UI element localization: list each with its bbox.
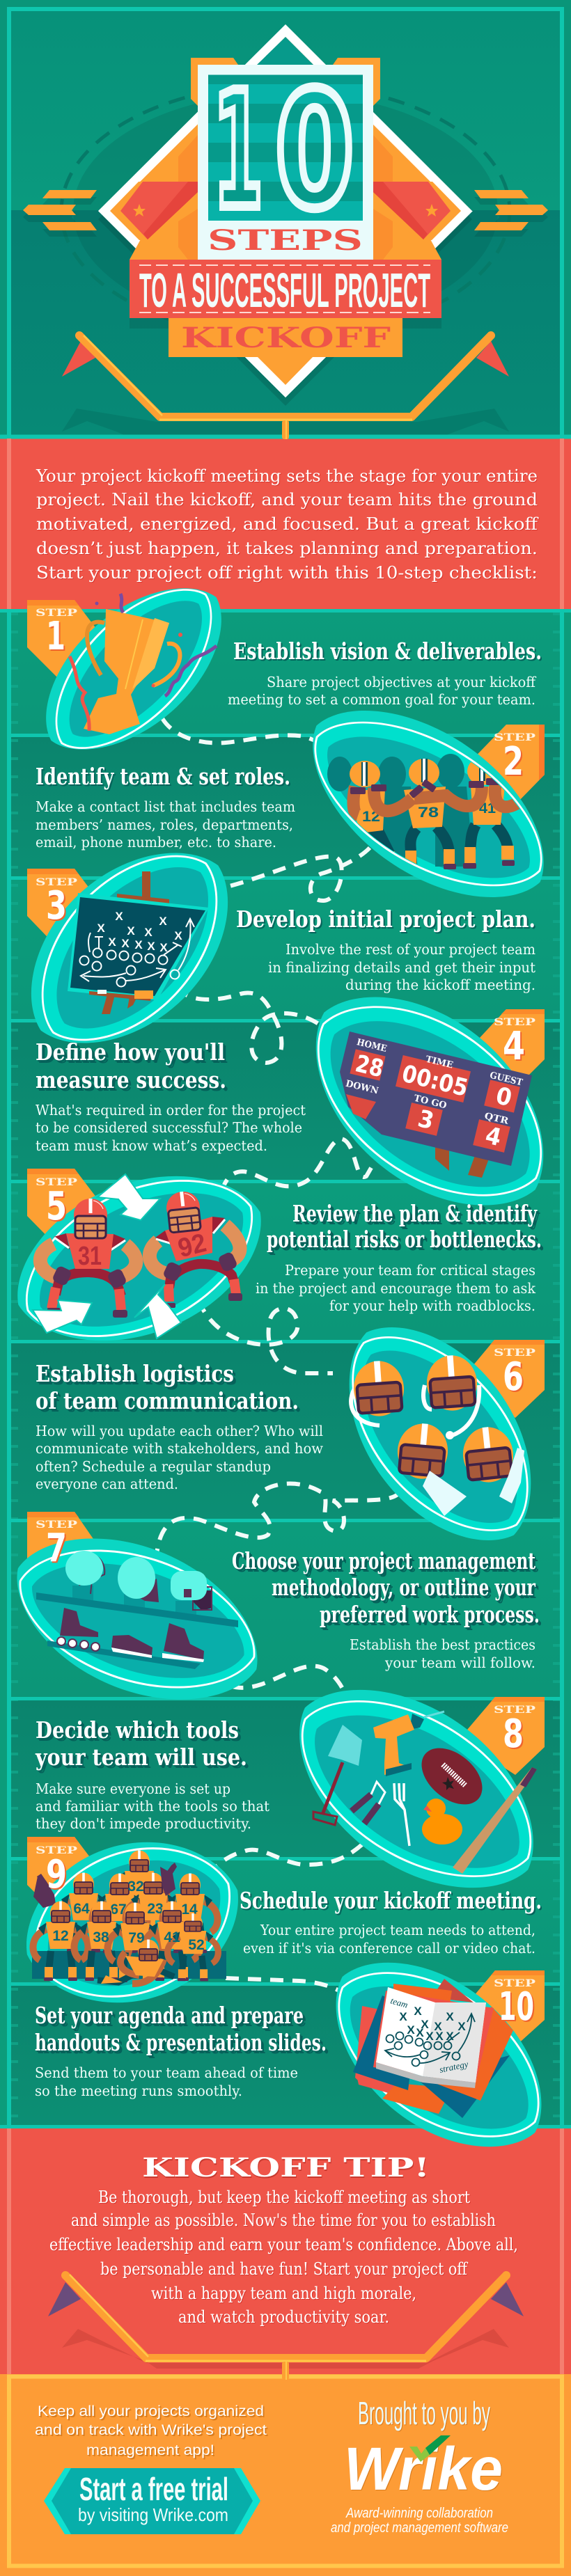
player 12: 12 [362, 809, 380, 825]
player 92: 92 [175, 1228, 209, 1263]
kickoff tip body: be personable and have fun! Start your project off [100, 2259, 469, 2279]
step 3 ball [0, 798, 277, 1098]
icon: open playbook [376, 1987, 486, 2088]
step 6 label: STEP [494, 1348, 536, 1359]
step 5 body: in the project and encourage them to ask [256, 1280, 536, 1297]
STEPS word: STEPS [208, 224, 363, 257]
helmets [352, 1354, 516, 1485]
bench [32, 1951, 226, 1979]
red tip band [0, 2128, 571, 2374]
step 6 heading: of team communication. [36, 1387, 299, 1414]
call to action button: by visiting Wrike.com [78, 2504, 228, 2525]
back row numbers [73, 1879, 198, 1918]
step 8 heading: your team will use. [35, 1744, 247, 1771]
front row numbers: 52 [188, 1937, 205, 1953]
scoreboard: HOME [356, 1037, 388, 1054]
back row numbers: 23 [147, 1901, 164, 1917]
kickoff tip body [49, 2188, 518, 2327]
step 4 body: to be considered successful? The whole [36, 1119, 302, 1136]
player 31 [40, 1199, 136, 1318]
back row numbers: 67 [110, 1902, 127, 1918]
step 8 number: 8 [503, 1712, 524, 1757]
step 7 heading [232, 1547, 540, 1628]
footer promo text: management app! [86, 2442, 214, 2458]
step 8 heading [35, 1716, 247, 1771]
white diamond [98, 24, 472, 397]
inner diamond [111, 37, 460, 385]
back row players [56, 1850, 217, 1953]
step 6 body [36, 1423, 323, 1492]
step 2 heading: Identify team & set roles. [36, 763, 290, 790]
white number card [198, 65, 373, 260]
footer promo text [35, 2403, 267, 2458]
back row numbers: 14 [181, 1902, 198, 1918]
step 6 heading [36, 1360, 299, 1414]
KICKOFF word: KICKOFF [181, 322, 391, 354]
step 8 heading: Decide which tools [36, 1716, 239, 1744]
step 9 body: even if it's via conference call or video chat. [243, 1940, 535, 1957]
player 78: 78 [418, 805, 439, 821]
icon: team huddle [327, 754, 521, 871]
step 9 body [243, 1922, 535, 1957]
step 2 label: STEP [494, 732, 536, 743]
white lower corners [98, 211, 473, 251]
step 3 body: during the kickoff meeting. [345, 977, 535, 993]
step 1 body: meeting to set a common goal for your team. [228, 691, 535, 708]
wing chevrons left [23, 190, 97, 237]
step 7 panel [0, 1499, 540, 1739]
step 6 ball [295, 1282, 571, 1586]
front row players [33, 1902, 218, 1982]
intro paragraph: Your project kickoff meeting sets the stage for your entire [36, 466, 538, 486]
icon: chalkboard play: X [108, 935, 116, 949]
step 6 number: 6 [503, 1354, 524, 1400]
icon: open playbook: X [416, 2026, 424, 2039]
player 78 [404, 759, 456, 871]
icon: open playbook: strategy [439, 2059, 469, 2075]
step 8 body: Make sure everyone is set up [36, 1780, 230, 1797]
step 7 number: 7 [46, 1526, 67, 1571]
kickoff tip body: Be thorough, but keep the kickoff meeting as short [98, 2188, 470, 2207]
step 1 ball [7, 541, 260, 797]
icon: skates and cleat [57, 1608, 204, 1662]
icon: stack of books [353, 1979, 513, 2118]
team players group [33, 1850, 218, 1984]
diamond shadow [98, 33, 472, 406]
icon: open playbook: X [434, 2020, 442, 2033]
step 1 badge [27, 600, 107, 682]
step 6 badge [460, 1340, 545, 1418]
icon: shovel [313, 1725, 362, 1825]
step 3 panel [0, 798, 536, 1098]
step 3 body: Involve the rest of your project team [286, 941, 535, 958]
scoreboard: 3 [415, 1105, 437, 1135]
intro paragraph: motivated, energized, and focused. But a great kickoff [36, 514, 539, 534]
wrike tagline: Award-winning collaboration [345, 2506, 493, 2521]
icon: chalkboard play: X [134, 938, 143, 951]
kickoff tip body: and watch productivity soar. [178, 2307, 389, 2327]
back row numbers: 32 [127, 1879, 144, 1895]
icon: chalkboard play: X [144, 926, 152, 939]
kickoff orange box [169, 317, 402, 357]
step 3 body [268, 941, 536, 993]
step 7 body [350, 1636, 535, 1671]
icon: drill [373, 1712, 444, 1776]
step 5 ball [0, 1125, 297, 1391]
header dashed field ellipse [61, 84, 510, 338]
icon: open playbook: X [414, 2005, 422, 2018]
icon: open playbook: X [446, 2030, 454, 2043]
icon: open playbook: X [435, 2030, 444, 2043]
step 7 ball [0, 1499, 291, 1739]
step 6 heading: Establish logistics [36, 1360, 234, 1387]
footer promo text: and on track with Wrike's project [35, 2421, 267, 2438]
number 10 [213, 58, 354, 244]
wrike tagline [331, 2506, 508, 2536]
step 1 label: STEP [36, 608, 78, 619]
step 10 heading: handouts & presentation slides. [35, 2029, 327, 2056]
header badge [23, 24, 548, 406]
step 5 heading [267, 1200, 542, 1253]
step 1 body [228, 674, 536, 708]
step 10 panel [35, 1916, 571, 2193]
step 7 body: your team will follow. [384, 1654, 535, 1671]
wrike tagline: and project management software [331, 2520, 508, 2536]
scoreboard: DOWN [345, 1079, 380, 1097]
step 3 badge [27, 869, 107, 952]
kickoff tip heading: KICKOFF TIP! [142, 2152, 430, 2183]
icon: chalkboard play: X [174, 929, 182, 942]
step 9 panel [0, 1798, 542, 2047]
player 41 [463, 757, 515, 869]
step 3 label: STEP [36, 877, 78, 888]
step 8 label: STEP [494, 1705, 536, 1716]
kickoff orange box shadow [130, 317, 441, 329]
step 4 number: 4 [503, 1024, 525, 1069]
step 2 panel [36, 663, 571, 945]
icon: chalkboard play: X [121, 937, 130, 950]
icon: football [411, 1737, 493, 1816]
player 92 [150, 1190, 242, 1308]
step 9 number: 9 [46, 1852, 67, 1897]
scoreboard: 4 [483, 1121, 504, 1152]
headset [351, 1385, 479, 1437]
step 10 badge [467, 1970, 545, 2046]
step 3 body: in finalizing details and get their input [268, 959, 536, 976]
step 10 number: 10 [499, 1984, 534, 2030]
step 4 heading: measure success. [36, 1066, 226, 1093]
step 1 panel [7, 541, 542, 797]
front row numbers: 41 [164, 1929, 180, 1945]
scoreboard: GUEST [489, 1070, 524, 1089]
step 2 ball [267, 663, 571, 945]
step 5 badge [27, 1169, 107, 1251]
icon: megaphone and glove [423, 1448, 524, 1516]
orange tabs [191, 58, 380, 106]
icon: baseball bat [453, 1767, 537, 1874]
goal post bottom [48, 2275, 524, 2380]
scoreboard: 28 [352, 1050, 386, 1083]
step 5 panel [0, 1125, 542, 1391]
step 8 body [36, 1780, 270, 1832]
step 6 body: communicate with stakeholders, and how [36, 1440, 323, 1457]
step 6 body: everyone can attend. [36, 1476, 178, 1492]
wrike logo: Wrike [344, 2435, 503, 2503]
icon: open playbook: X [425, 2030, 434, 2043]
icon: open playbook: X [446, 2010, 454, 2023]
confetti ribbons [70, 594, 217, 731]
goal post shadow on header [62, 409, 509, 448]
icon: rubber duck [422, 1799, 462, 1844]
icon: trophy [84, 609, 180, 734]
step 9 label: STEP [36, 1845, 78, 1856]
step 2 body: email, phone number, etc. to share. [36, 834, 276, 851]
scoreboard: TO GO [413, 1093, 448, 1111]
icon: helmets rack [65, 1551, 212, 1611]
red side bands with stars [110, 182, 461, 240]
step 5 number: 5 [46, 1184, 67, 1229]
goal post shadow in tip band [62, 2329, 509, 2369]
step 5 body [256, 1262, 536, 1314]
intro paragraph: project. Nail the kickoff, and your team hits the ground [36, 490, 538, 509]
icon: open playbook: X [421, 2018, 429, 2031]
call to action button: Start a free trial [79, 2471, 228, 2507]
pointing gloves [33, 1863, 177, 1908]
step 7 body: Establish the best practices [350, 1636, 535, 1653]
step 9 ball [0, 1798, 273, 2047]
step 8 body: they don't impede productivity. [36, 1815, 251, 1832]
wing chevrons right [474, 190, 548, 237]
kneeling player [97, 1939, 174, 1984]
step 4 badge [461, 1009, 545, 1089]
teal diamond apex [257, 37, 313, 65]
header background [0, 0, 571, 438]
step 7 badge [27, 1512, 117, 1594]
step 4 ball [261, 944, 571, 1258]
number 10: 1 [213, 58, 263, 244]
step 4 body: What's required in order for the project [36, 1102, 306, 1119]
step 3 number: 3 [46, 883, 67, 929]
step 10 heading: Set your agenda and prepare [35, 2002, 304, 2029]
step 1 number: 1 [46, 614, 65, 659]
intro paragraph: doesn’t just happen, it takes planning and preparation. [36, 539, 538, 558]
icon: chalkboard play: X [147, 940, 155, 953]
step 7 label: STEP [36, 1519, 78, 1531]
step 2 body: Make a contact list that includes team [36, 798, 295, 815]
step 4 panel [36, 944, 571, 1258]
dashed route between steps [157, 718, 400, 1993]
step 2 body [36, 798, 295, 851]
step 5 label: STEP [36, 1177, 78, 1188]
player 41: 41 [479, 800, 496, 816]
icon: chalkboard play: X [159, 941, 168, 954]
equipment shelves [36, 1586, 238, 1669]
step 2 number: 2 [503, 739, 524, 784]
scoreboard: QTR [483, 1111, 510, 1127]
player 31: 31 [78, 1242, 102, 1271]
step 9 badge [27, 1837, 107, 1920]
step 2 badge [464, 725, 545, 805]
step 5 body: Prepare your team for critical stages [285, 1262, 535, 1279]
step 2 body: members’ names, roles, departments, [36, 816, 293, 833]
step 5 body: for your help with roadblocks. [329, 1297, 535, 1314]
step 4 body [36, 1102, 306, 1154]
step 10 body: Send them to your team ahead of time [35, 2064, 298, 2081]
bottom diamond tip [244, 356, 327, 397]
icon: open playbook: X [457, 2020, 466, 2033]
step 6 panel [36, 1282, 571, 1586]
icon: open playbook: team [389, 1995, 409, 2010]
step 8 ball [249, 1639, 571, 1938]
step 4 heading: Define how you'll [36, 1038, 225, 1066]
icon: hand gripper [352, 1782, 385, 1824]
intro paragraph [36, 466, 539, 583]
red intro band [0, 438, 571, 609]
step 9 body: Your entire project team needs to attend, [260, 1922, 535, 1938]
step 8 body: and familiar with the tools so that [36, 1798, 270, 1815]
step 6 body: often? Schedule a regular standup [36, 1458, 271, 1475]
footer promo text: Keep all your projects organized [38, 2403, 264, 2419]
step 10 heading [35, 2002, 327, 2056]
step 8 badge [460, 1697, 545, 1775]
icon: chalkboard play: X [97, 922, 105, 935]
scoreboard: TIME [425, 1054, 454, 1071]
scoreboard [340, 1032, 532, 1178]
number 10: 0 [275, 58, 354, 244]
step 6 body: How will you update each other? Who will [36, 1423, 323, 1439]
intro paragraph: Start your project off right with this 10-step checklist: [36, 563, 538, 583]
icon: chalkboard play [68, 871, 209, 1014]
front row numbers: 79 [128, 1930, 145, 1946]
kickoff tip body: with a happy team and high morale, [151, 2284, 416, 2303]
step 8 panel [35, 1639, 571, 1938]
front row numbers [52, 1928, 205, 1953]
step 4 body: team must know what’s expected. [36, 1137, 267, 1154]
front row numbers: 12 [52, 1928, 69, 1944]
call to action button [44, 2468, 260, 2534]
kickoff tip body: and simple as possible. Now's the time for you to establish [71, 2211, 496, 2230]
striped teal number panel [208, 75, 363, 221]
step 10 body [35, 2064, 298, 2099]
icon: chalkboard play: X [127, 924, 135, 938]
scoreboard: 00:05 [399, 1060, 471, 1103]
scoreboard: 0 [493, 1082, 515, 1112]
icon: chalkboard play: X [115, 910, 123, 923]
icon: open playbook: X [407, 2023, 415, 2037]
step 4 label: STEP [494, 1017, 536, 1028]
linked arms and gloves [350, 778, 521, 816]
step 1 body: Share project objectives at your kickoff [267, 674, 536, 690]
orange footer band [0, 2374, 571, 2576]
step 10 ball [288, 1916, 571, 2193]
step 10 body: so the meeting runs smoothly. [35, 2083, 242, 2099]
back row numbers: 64 [73, 1901, 90, 1917]
step 4 heading [36, 1038, 226, 1093]
icon: fork [394, 1783, 409, 1846]
green step field bands [0, 609, 571, 2128]
icon: chalkboard play: X [159, 915, 167, 928]
step 10 label: STEP [494, 1978, 536, 1989]
orange folds [130, 135, 441, 260]
icon: cycle arrows [33, 1174, 181, 1338]
goal post top [62, 335, 509, 439]
front row numbers: 38 [93, 1929, 109, 1945]
player 12 [350, 761, 395, 863]
icon: open playbook: X [399, 2010, 407, 2023]
red subtitle banner [130, 260, 441, 318]
